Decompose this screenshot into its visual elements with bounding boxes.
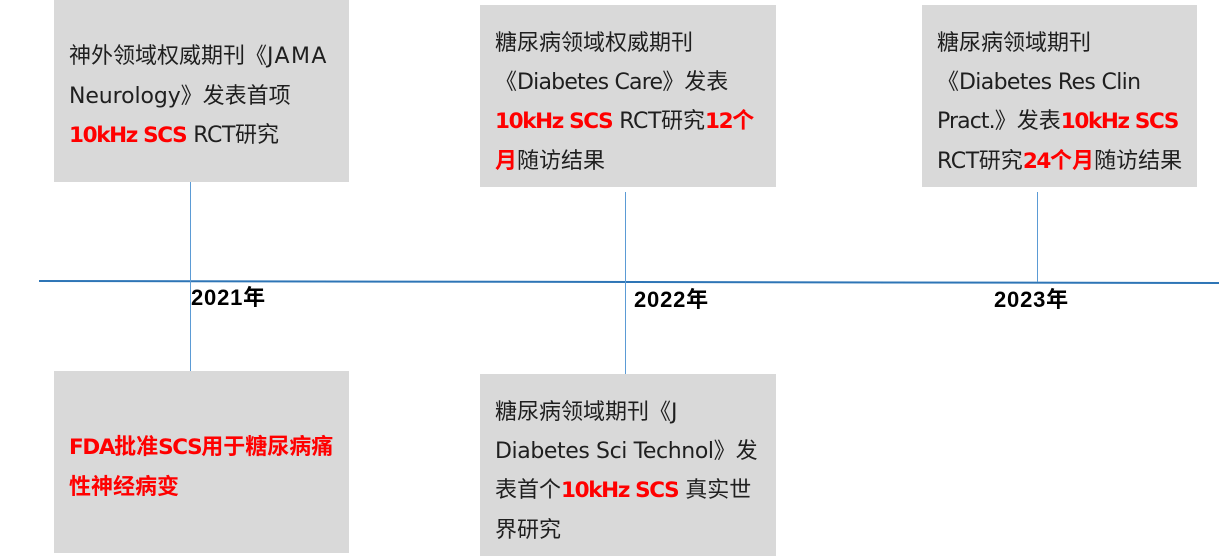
text: J Diabetes Sci Technol: Diabetes Sci Technol》发 — [495, 438, 758, 464]
panel: 2022 J Diabetes Sci Technol — [480, 374, 776, 556]
text: Diabetes Res Clin Pract: 糖尿病领域期刊 — [937, 31, 1091, 56]
year label 2021: 2021年 — [191, 285, 266, 310]
text: FDA approval: 性神经病变 — [69, 474, 179, 500]
connector 2022 bottom — [625, 282, 626, 374]
text: Diabetes Res Clin Pract: 《Diabetes Res Clin — [937, 70, 1140, 94]
panel: 2021 FDA approval — [54, 371, 349, 553]
connector 2022 top — [625, 192, 626, 282]
text: Diabetes Care: 《Diabetes Care》发表 — [495, 70, 728, 94]
connector 2021 top — [190, 182, 191, 282]
text: JAMA Neurology: 神外领域权威期刊《JAMA — [69, 44, 328, 69]
text: Diabetes Care: 10kHz SCS RCT研究12个 — [495, 109, 754, 134]
connector 2023 top — [1037, 192, 1038, 282]
text: J Diabetes Sci Technol: 糖尿病领域期刊《J — [495, 400, 677, 425]
panel: 2022 Diabetes Care — [480, 5, 776, 187]
year label 2022: 2022年 — [634, 287, 709, 312]
text: JAMA Neurology: Neurology》发表首项 — [69, 84, 291, 108]
year label 2023: 2023年 — [994, 287, 1069, 312]
text: FDA approval — [69, 434, 333, 500]
text: Diabetes Care — [495, 31, 754, 174]
text: J Diabetes Sci Technol — [495, 400, 758, 542]
connector 2021 bottom — [190, 282, 191, 371]
text: Diabetes Res Clin Pract — [937, 31, 1182, 174]
text: Diabetes Care: 月随访结果 — [495, 148, 605, 174]
text: JAMA Neurology: 10kHz SCS RCT研究 — [69, 123, 279, 148]
text: J Diabetes Sci Technol: 表首个10kHz SCS 真实世 — [495, 478, 751, 503]
text: FDA approval: FDA批准SCS用于糖尿病痛 — [69, 435, 333, 460]
text: J Diabetes Sci Technol: 界研究 — [495, 518, 561, 542]
text: Diabetes Care: 糖尿病领域权威期刊 — [495, 31, 693, 56]
text: Diabetes Res Clin Pract: Pract.》发表10kHz SCS — [937, 109, 1178, 134]
text: Diabetes Res Clin Pract: RCT研究24个月随访结果 — [937, 148, 1182, 174]
panel: 2021 JAMA Neurology — [54, 0, 349, 182]
text: JAMA Neurology — [69, 44, 328, 148]
panel: 2023 Diabetes Res Clin Pract — [922, 5, 1197, 187]
